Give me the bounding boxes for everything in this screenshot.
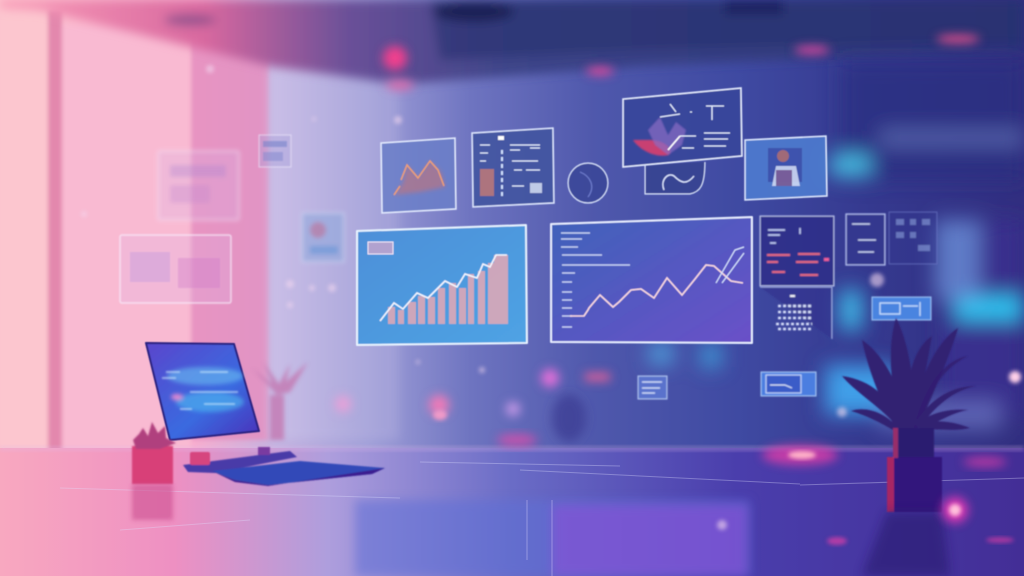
photo panel: [745, 136, 827, 200]
distant silhouette: [552, 394, 586, 442]
window frames at left: [0, 0, 269, 460]
blurred city lights background: [650, 60, 1024, 430]
bar chart panel: [357, 225, 527, 345]
small blue panel lower: [761, 372, 816, 396]
plant pot: [893, 428, 934, 458]
ghost panel center-left: [302, 213, 344, 262]
legend block: [368, 242, 393, 254]
small chart panel: [381, 138, 456, 213]
dark plant right: [842, 318, 976, 512]
laptop screen: [146, 343, 259, 440]
line chart panel: [551, 217, 752, 343]
ghost panel left: [120, 235, 231, 303]
small blue panel: [872, 297, 931, 320]
table surface: [0, 446, 1024, 576]
plant reflection: [862, 512, 950, 576]
ceiling: [0, 0, 1024, 84]
lavender wall section: [269, 65, 399, 440]
ghost panel small top: [259, 135, 291, 167]
line trend: [570, 265, 743, 316]
faint grid panel: [889, 212, 937, 264]
top panel with donut chart: [623, 88, 742, 167]
red pen cup and plant: [132, 422, 176, 520]
small notch panel: [645, 162, 705, 194]
rising bars: [388, 255, 508, 324]
trend line: [380, 255, 507, 321]
keyboard and tablet on the table: [183, 447, 385, 486]
axis labels: [561, 233, 630, 327]
floating bokeh dots: [81, 65, 884, 530]
dark table panel right: [760, 216, 834, 286]
dark matrix panel: [760, 287, 832, 339]
blurred plant in the back: [252, 362, 308, 440]
small blue panel centre: [638, 376, 667, 399]
circular gauge: [568, 163, 608, 203]
ghost panel top left: [158, 151, 239, 220]
neon light glows: [335, 35, 1021, 545]
narrow top-right panel: [846, 214, 885, 265]
bar and table panel: [472, 128, 554, 207]
